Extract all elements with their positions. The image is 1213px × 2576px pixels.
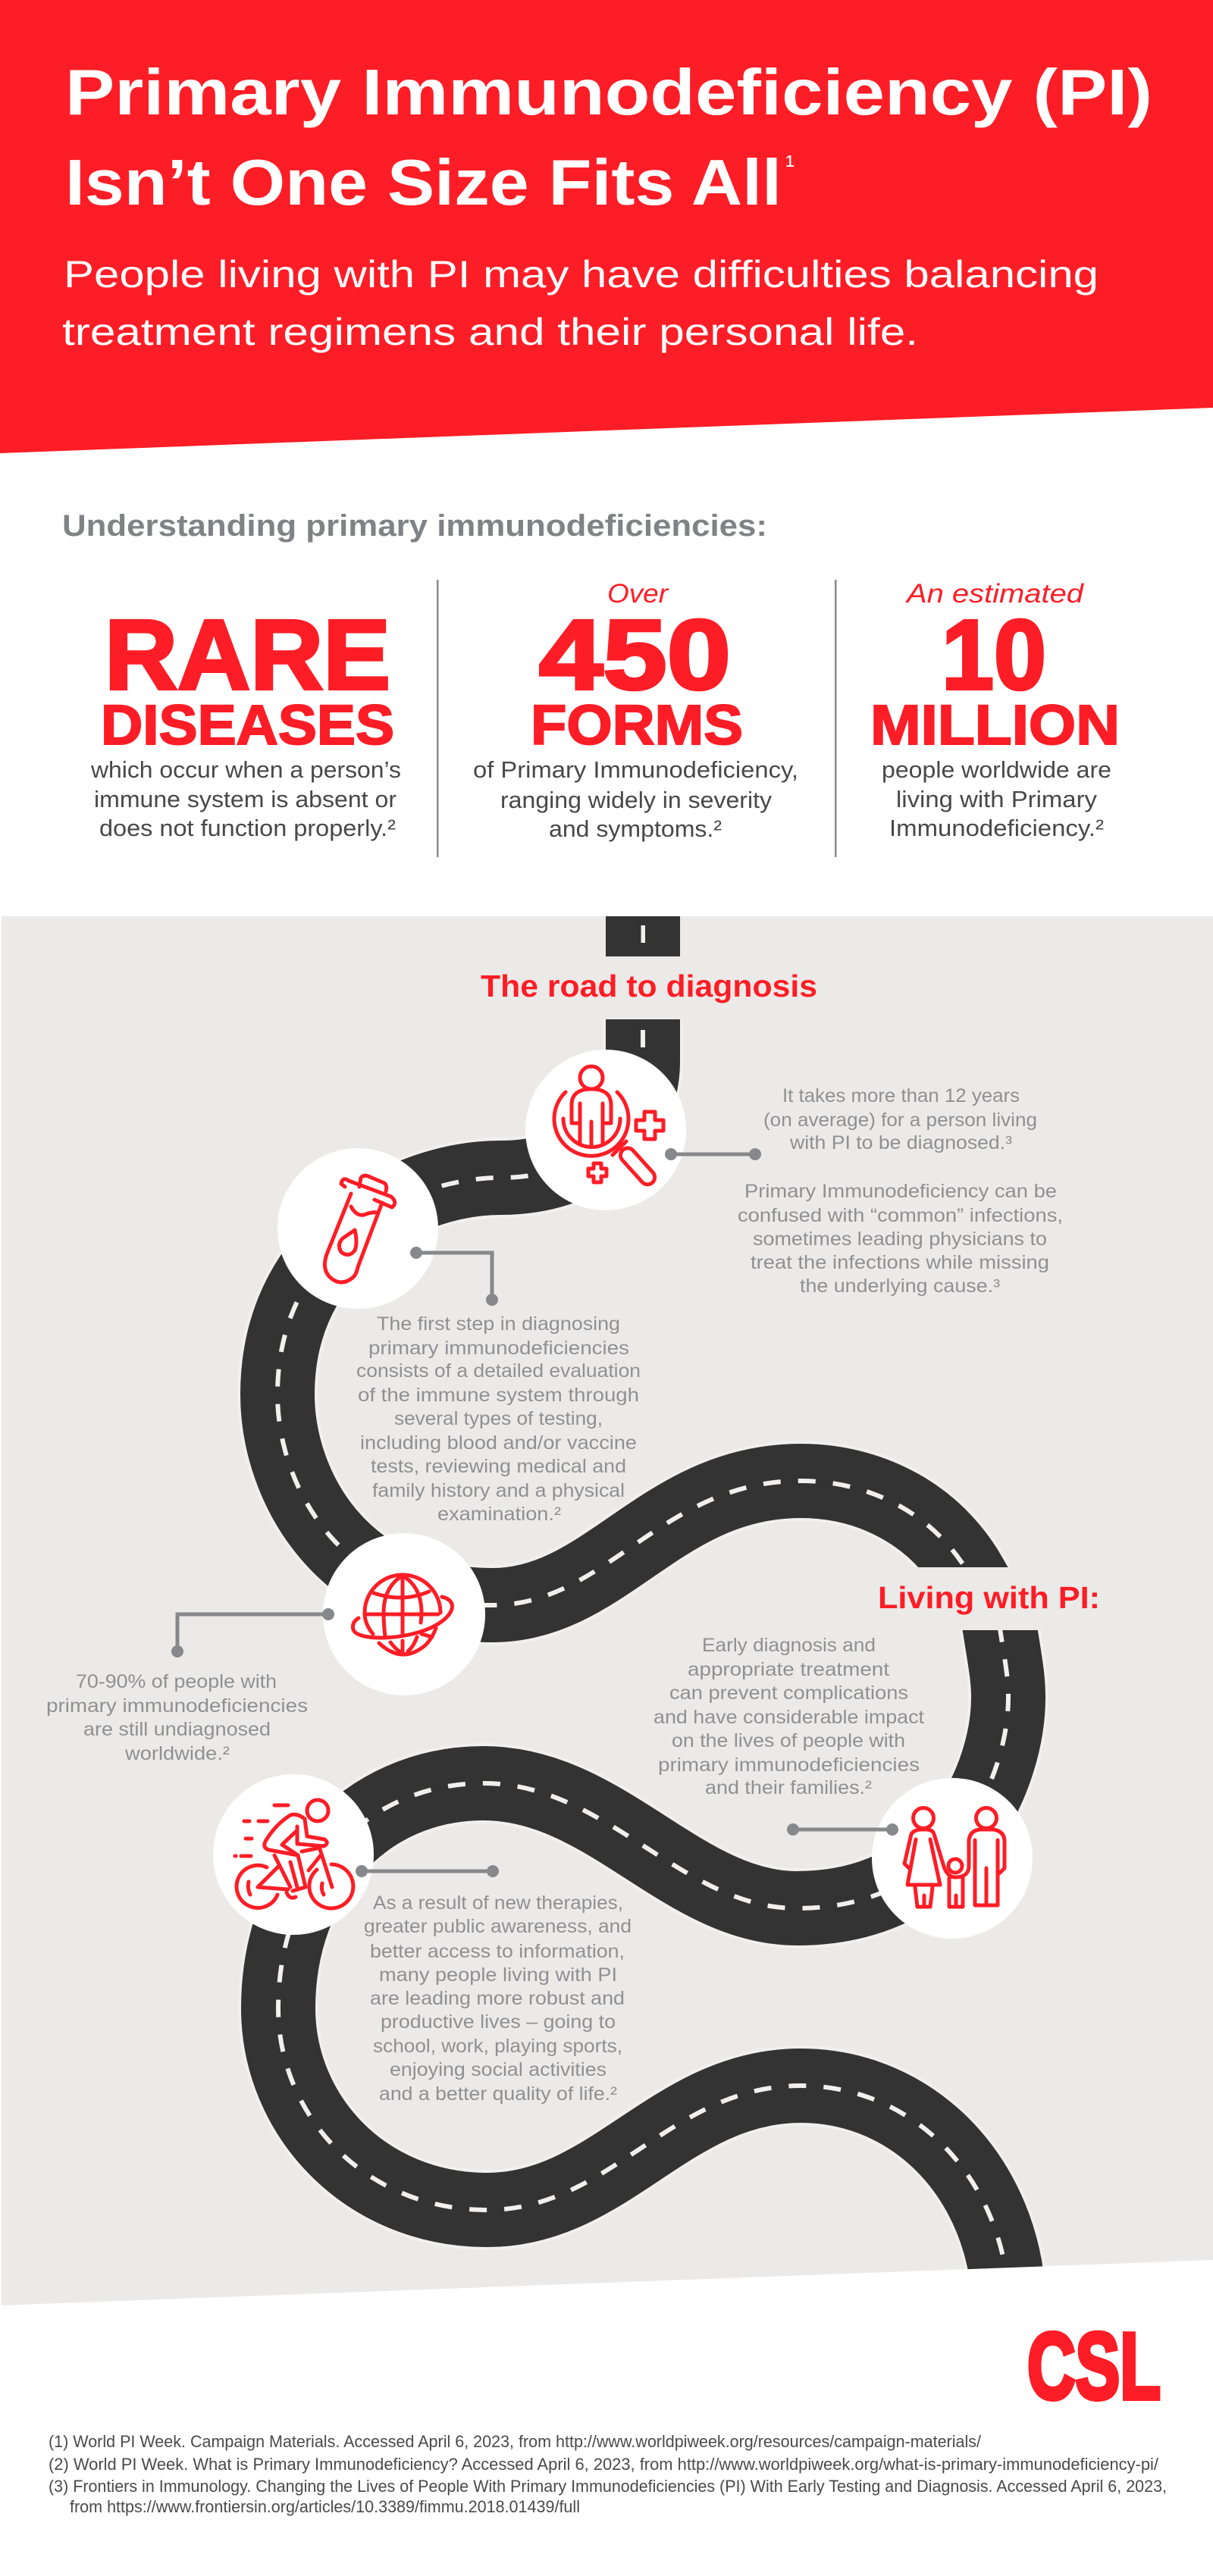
text block: first step	[356, 1313, 641, 1525]
title: Primary Immunodeficiency (PI)	[65, 57, 1152, 129]
stat: 450 forms	[473, 579, 798, 842]
text block: first step: family history and a physical	[372, 1480, 625, 1501]
stat: 10 million: MILLION	[870, 693, 1120, 756]
stat: rare diseases: which occur when a person’s	[90, 756, 401, 783]
text block: first step: of the immune system through	[358, 1385, 639, 1406]
text block: undiagnosed: primary immunodeficiencies	[46, 1695, 308, 1717]
footnotes: (1) World PI Week. Campaign Materials. Accessed April 6, 2023, from http://www.worldpiweek.org/resources/campaign-materials/	[49, 2432, 982, 2451]
panel: road background	[2, 916, 1213, 2305]
subtitle	[62, 253, 1099, 353]
text block: undiagnosed: worldwide.²	[124, 1743, 230, 1764]
text block: early diagnosis: and their families.²	[705, 1777, 872, 1798]
logo: CSL: CSL	[1027, 2315, 1161, 2419]
road	[0, 916, 1213, 2349]
stat: rare diseases: does not function properly.²	[99, 815, 396, 841]
text block: first step: tests, reviewing medical and	[371, 1456, 626, 1477]
text block: diagnosis time: (on average) for a person living	[763, 1110, 1037, 1131]
divider	[835, 580, 837, 857]
heading: living with PI: Living with PI:	[878, 1580, 1100, 1615]
divider	[437, 580, 438, 857]
text block: new therapies: productive lives – going to	[381, 2011, 616, 2033]
stat: 450 forms: and symptoms.²	[549, 815, 722, 842]
text block: undiagnosed: 70-90% of people with	[76, 1671, 277, 1692]
text block: new therapies: school, work, playing sports,	[373, 2036, 622, 2057]
icon: globe	[323, 1533, 485, 1695]
stat: rare diseases	[90, 599, 401, 841]
footnotes	[49, 2432, 1167, 2516]
subtitle: treatment regimens and their personal life.	[62, 311, 918, 353]
text block: early diagnosis: can prevent complications	[669, 1682, 908, 1704]
text block: early diagnosis: primary immunodeficiencies	[658, 1754, 920, 1776]
connector: magnifier	[665, 1148, 761, 1160]
text block: first step: consists of a detailed evaluation	[356, 1360, 641, 1382]
heading: understanding: Understanding primary immunodeficiencies:	[62, 509, 767, 543]
text block: first step: several types of testing,	[394, 1408, 603, 1429]
text block: new therapies: greater public awareness, and	[364, 1916, 632, 1937]
text block: diagnosis time: the underlying cause.³	[800, 1275, 1000, 1297]
text block: early diagnosis: on the lives of people with	[672, 1730, 905, 1751]
text block: diagnosis time	[738, 1085, 1063, 1297]
text block: new therapies: As a result of new therapies,	[373, 1892, 623, 1914]
text block: new therapies: are leading more robust and	[370, 1988, 625, 2009]
text block: diagnosis time: sometimes leading physicians to	[753, 1229, 1047, 1250]
connector: cyclist	[356, 1865, 499, 1877]
subtitle: People living with PI may have difficulties balancing	[64, 253, 1099, 296]
stat: 10 million: An estimated	[905, 579, 1085, 609]
text block: diagnosis time: It takes more than 12 years	[782, 1085, 1020, 1106]
stat: 450 forms: 450	[539, 599, 731, 710]
stat: 450 forms: of Primary Immunodeficiency,	[473, 756, 798, 783]
text block: new therapies: and a better quality of life.²	[379, 2083, 617, 2105]
stat: rare diseases: RARE	[105, 599, 390, 710]
stat: 10 million: people worldwide are	[882, 756, 1111, 783]
text block: early diagnosis	[654, 1635, 924, 1798]
stat: 10 million	[870, 579, 1120, 841]
icon: test tube	[277, 1148, 438, 1309]
footnotes: (2) World PI Week. What is Primary Immunodeficiency? Accessed April 6, 2023, from http://www.worldpiweek.org/what-is-primary-immunodeficiency-pi/	[49, 2455, 1159, 2474]
connector: globe	[171, 1608, 334, 1657]
text block: first step: The first step in diagnosing	[377, 1313, 620, 1335]
stat: 450 forms: Over	[607, 579, 669, 609]
text block: new therapies	[364, 1892, 632, 2105]
title: ¹	[785, 149, 795, 180]
text block: undiagnosed	[46, 1671, 308, 1764]
title	[65, 57, 1152, 219]
text block: diagnosis time: with PI to be diagnosed.³	[789, 1132, 1012, 1153]
text block: early diagnosis: appropriate treatment	[688, 1659, 889, 1680]
text block: diagnosis time: treat the infections while missing	[751, 1252, 1049, 1273]
footnotes: (3) Frontiers in Immunology. Changing the Lives of People With Primary Immunodeficiencies (PI) With Early Testing and Diagnosis. Accessed April 6, 2023,	[49, 2477, 1167, 2496]
heading: road to diagnosis: The road to diagnosis	[481, 969, 817, 1003]
text block: diagnosis time: Primary Immunodeficiency can be	[744, 1181, 1057, 1202]
text block: undiagnosed: are still undiagnosed	[83, 1719, 271, 1740]
stat: rare diseases: DISEASES	[101, 693, 394, 756]
connector: family	[787, 1823, 898, 1836]
stat: 450 forms: FORMS	[531, 693, 743, 756]
text block: early diagnosis: and have considerable impact	[654, 1707, 924, 1728]
icon: cyclist	[213, 1774, 374, 1935]
stat: 10 million: living with Primary	[896, 786, 1098, 812]
text block: early diagnosis: Early diagnosis and	[702, 1635, 876, 1656]
text block: new therapies: many people living with PI	[379, 1964, 617, 1986]
stat: rare diseases: immune system is absent or	[94, 786, 396, 812]
connector: tube	[410, 1247, 498, 1306]
footnotes: from https://www.frontiersin.org/articles/10.3389/fimmu.2018.01439/full	[70, 2497, 580, 2516]
header banner	[0, 0, 1213, 453]
text block: first step: examination.²	[437, 1504, 561, 1525]
text block: first step: primary immunodeficiencies	[368, 1338, 629, 1359]
text block: first step: including blood and/or vaccine	[360, 1432, 637, 1454]
stat: 10 million: Immunodeficiency.²	[889, 815, 1104, 841]
stat: 10 million: 10	[942, 599, 1046, 710]
text block: diagnosis time: confused with “common” infections,	[738, 1205, 1063, 1226]
icon: family	[872, 1778, 1033, 1939]
text block: new therapies: enjoying social activities	[390, 2059, 606, 2080]
title: Isn’t One Size Fits All	[65, 147, 782, 219]
stat: 450 forms: ranging widely in severity	[500, 787, 773, 813]
text block: new therapies: better access to information,	[370, 1941, 625, 1962]
icon: magnifier over person	[525, 1050, 686, 1210]
